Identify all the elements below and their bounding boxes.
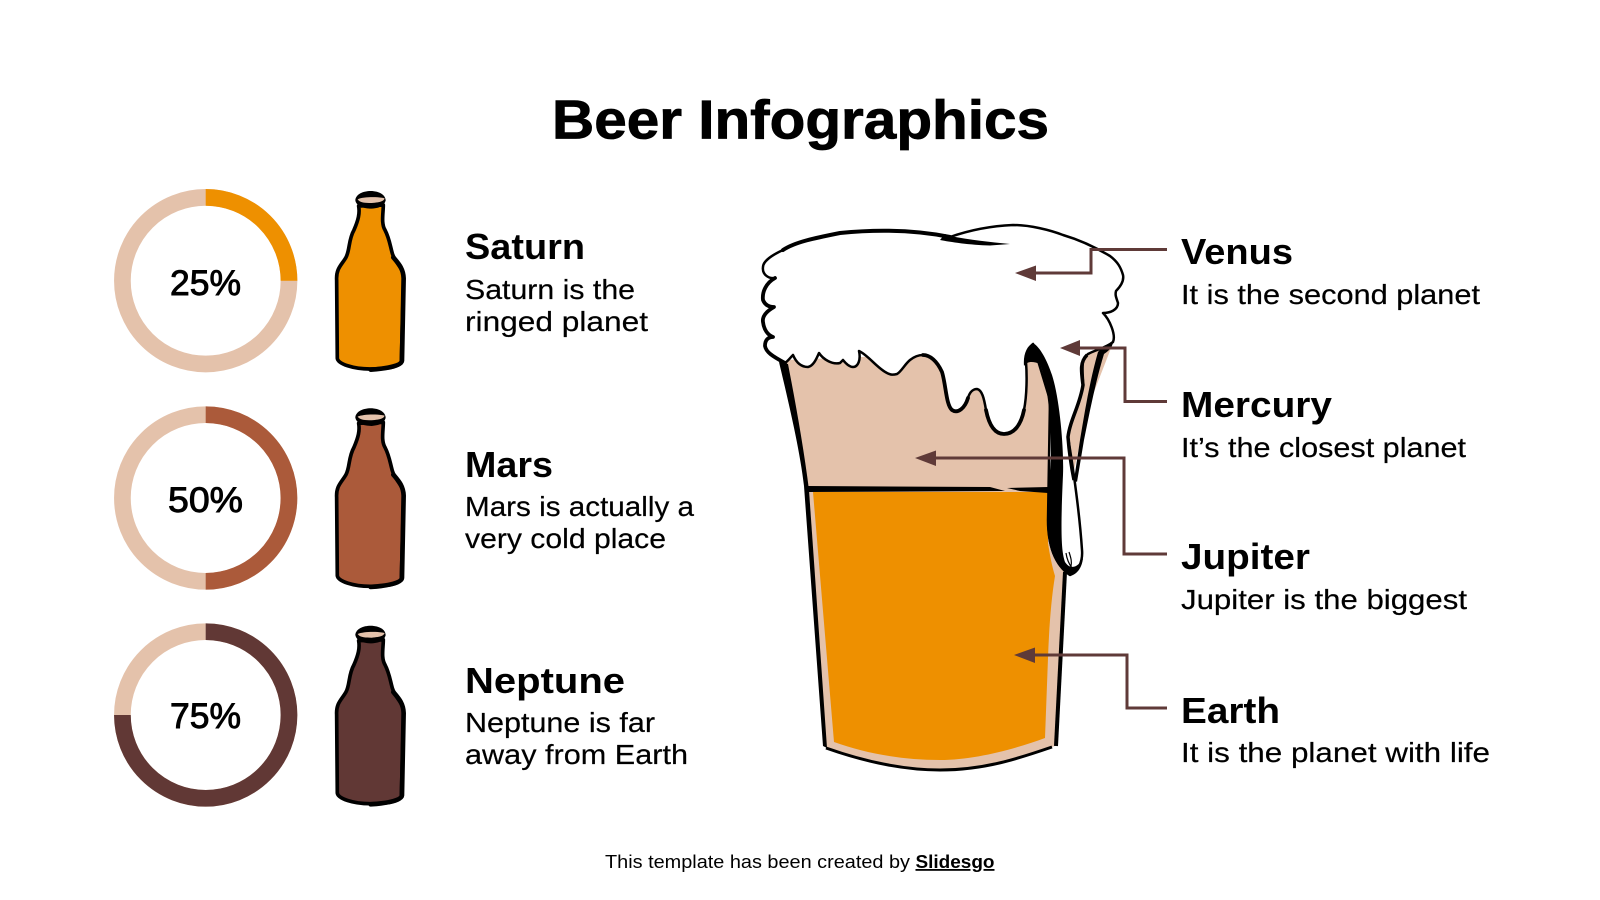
donut chart: 50%: 50% [168,481,243,520]
text block: Saturn: Saturn [465,226,585,267]
text block: Earth [1181,690,1490,768]
text block: Venus: It is the second planet [1181,279,1480,310]
foam [763,225,1123,575]
beer glass illustration [763,225,1123,770]
text block: Jupiter: Jupiter [1181,536,1310,577]
donut chart: 25% [122,197,289,364]
footer credit: This template has been created by [605,852,910,872]
arrow: Mercury [1060,340,1167,402]
icon: dark brown bottle [337,626,404,804]
text block: Venus: Venus [1181,231,1293,272]
thick peak and drip outline [1024,343,1083,576]
icon: orange bottle [337,191,404,370]
donut chart: 75% [122,632,289,798]
text block: Earth: Earth [1181,690,1280,731]
glass right wall upper [1074,341,1113,482]
foam top fold line [940,234,1010,246]
text block: Neptune: Neptune is far [465,707,655,738]
text block: Earth: It is the planet with life [1181,737,1490,768]
footer credit: Slidesgo [916,852,995,872]
text block: Neptune: Neptune [465,660,625,701]
title: Beer Infographics [552,88,1049,150]
text block: Mercury [1181,384,1466,463]
glass right wall lower [1056,572,1065,746]
text block: Saturn: Saturn is the [465,274,635,305]
icon: red-brown bottle [337,408,404,587]
foam top-left thick outline [783,231,950,250]
text block: Mars: Mars is actually a [465,491,694,522]
text block: Venus [1181,231,1480,310]
foam lower thick outline [763,278,1024,434]
text block: Mars: very cold place [465,523,666,554]
beer orange fill [813,492,1055,760]
glass body tan fill [785,343,1113,769]
text block: Neptune: away from Earth [465,739,688,770]
text block: Saturn: ringed planet [465,306,648,337]
donut chart: 25%: 25% [170,264,241,303]
drip highlights [1066,552,1072,568]
drip right strip outline [1068,355,1087,480]
text block: Mars: Mars [465,444,553,485]
donut chart: 75%: 75% [170,697,241,736]
glass left wall [779,362,827,748]
text block: Mars [465,444,694,554]
glass bottom edge [826,747,1052,770]
text block: Neptune [465,660,688,770]
text block: Jupiter [1181,536,1467,615]
donut chart: 50% [122,415,289,581]
beer level line [808,486,1048,493]
arrow: Jupiter [915,450,1167,554]
arrow: Earth [1014,648,1167,708]
text block: Jupiter: Jupiter is the biggest [1181,584,1467,615]
text block: Mercury: Mercury [1181,384,1332,425]
text block: Mercury: It’s the closest planet [1181,432,1466,463]
arrow: Venus [1015,250,1167,281]
text block: Saturn [465,226,648,337]
